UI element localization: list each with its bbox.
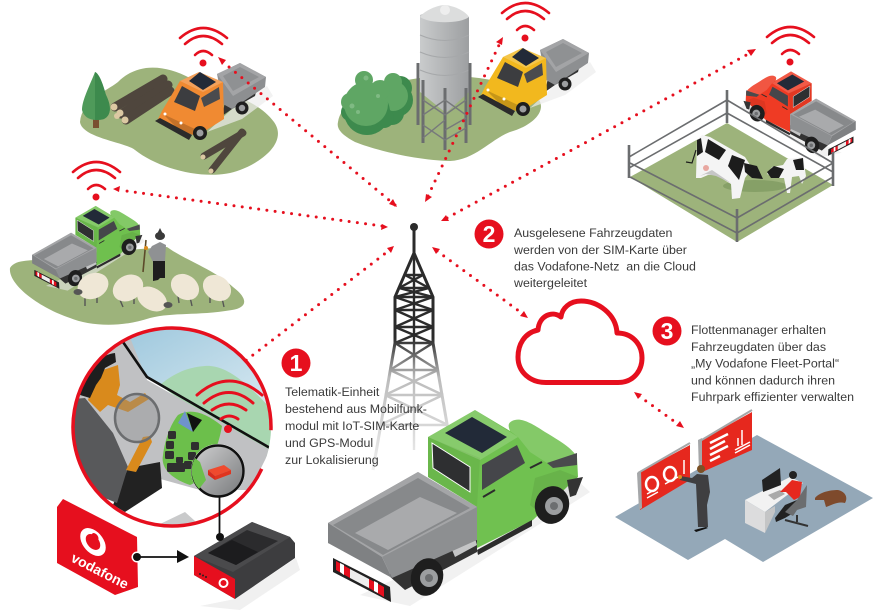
step 1 text: zur Lokalisierung <box>285 453 379 467</box>
red truck <box>740 71 856 158</box>
brand name: vodafone <box>69 549 132 592</box>
center console <box>163 411 222 485</box>
step 3 text: „My Vodafone Fleet-Portal“ <box>691 356 839 370</box>
ground patch <box>80 68 278 175</box>
link: fleet office <box>634 392 684 428</box>
steering wheel <box>115 394 159 442</box>
right screen <box>698 410 752 473</box>
calf <box>767 157 806 193</box>
step 3 text: Flottenmanager erhalten <box>691 323 826 337</box>
left screen <box>637 443 690 510</box>
dotted connection lines <box>113 37 756 428</box>
silo <box>418 5 470 150</box>
step 2 text: weitergeleitet <box>513 276 588 290</box>
floor <box>615 435 873 562</box>
step 1 badge: 1 <box>290 350 303 376</box>
connector from magnifier to device <box>218 497 220 537</box>
step 2 text: werden von der SIM-Karte über <box>513 243 687 257</box>
ground patch <box>10 247 244 325</box>
link: telematics unit <box>237 246 394 368</box>
link: green truck <box>113 186 388 230</box>
fence front <box>629 145 833 242</box>
seated worker <box>775 471 808 526</box>
step 3 text: Fahrzeugdaten über das <box>691 340 826 354</box>
main green truck <box>328 410 590 606</box>
step 3 badge <box>652 316 682 346</box>
green truck <box>32 206 145 291</box>
link: cloud <box>432 247 528 318</box>
sheep flock <box>73 268 236 317</box>
inset: vehicle interior <box>71 326 273 528</box>
step 2 text: Ausgelesene Fahrzeugdaten <box>514 226 673 240</box>
scene: silo patch with yellow truck <box>338 3 596 161</box>
interior illustration <box>74 330 271 524</box>
loose logs <box>200 132 243 174</box>
yellow truck <box>478 39 596 116</box>
scene: pen with cows and red truck <box>629 27 856 242</box>
step 2 badge <box>474 220 504 248</box>
telematics device <box>194 522 300 610</box>
desk with monitor <box>745 468 803 533</box>
orange truck <box>155 63 273 140</box>
step 1 text: modul mit IoT-SIM-Karte <box>285 419 419 433</box>
step 1 text: und GPS-Modul <box>285 436 373 450</box>
scene: forestry patch with orange truck <box>80 28 278 175</box>
step 2 badge: 2 <box>483 221 495 247</box>
arrow from SIM card to device <box>133 550 189 563</box>
wifi icon <box>502 3 549 42</box>
step 1 text: bestehend aus Mobilfunk- <box>285 402 427 416</box>
wifi icon <box>73 162 120 200</box>
step 3 text: und können dadurch ihren <box>691 374 835 388</box>
scene: pasture with sheep and green truck <box>10 162 244 325</box>
vodafone logo <box>83 528 103 556</box>
radio tower <box>373 223 455 470</box>
pine tree <box>82 72 110 128</box>
wifi icon <box>180 28 227 66</box>
SIM card <box>57 499 142 595</box>
inset border <box>34 289 310 565</box>
cloud icon <box>518 301 642 382</box>
step 1 badge <box>282 348 310 378</box>
link: red truck <box>441 49 756 221</box>
link: orange truck <box>218 57 397 207</box>
log pile <box>110 79 170 124</box>
wifi icon <box>767 27 814 66</box>
ground patch <box>338 76 541 161</box>
bushes <box>341 71 413 135</box>
large cow <box>686 135 763 199</box>
step 3 badge: 3 <box>661 318 673 344</box>
scene: fleet management office <box>615 410 873 562</box>
pasture <box>630 123 833 242</box>
step 1 text: Telematik-Einheit <box>285 385 380 399</box>
step 2 text: das Vodafone-Netz an die Cloud <box>514 260 696 274</box>
dog <box>815 490 846 507</box>
fence back <box>629 90 833 172</box>
cow shadow <box>723 180 787 192</box>
driver <box>74 353 162 512</box>
man at screen <box>678 465 710 532</box>
magnifier with telematics box <box>191 444 245 498</box>
link: yellow truck <box>425 37 503 202</box>
step 3 text: Fuhrpark effizienter verwalten <box>691 390 854 404</box>
wifi signal <box>197 381 262 433</box>
shepherd <box>143 228 166 281</box>
